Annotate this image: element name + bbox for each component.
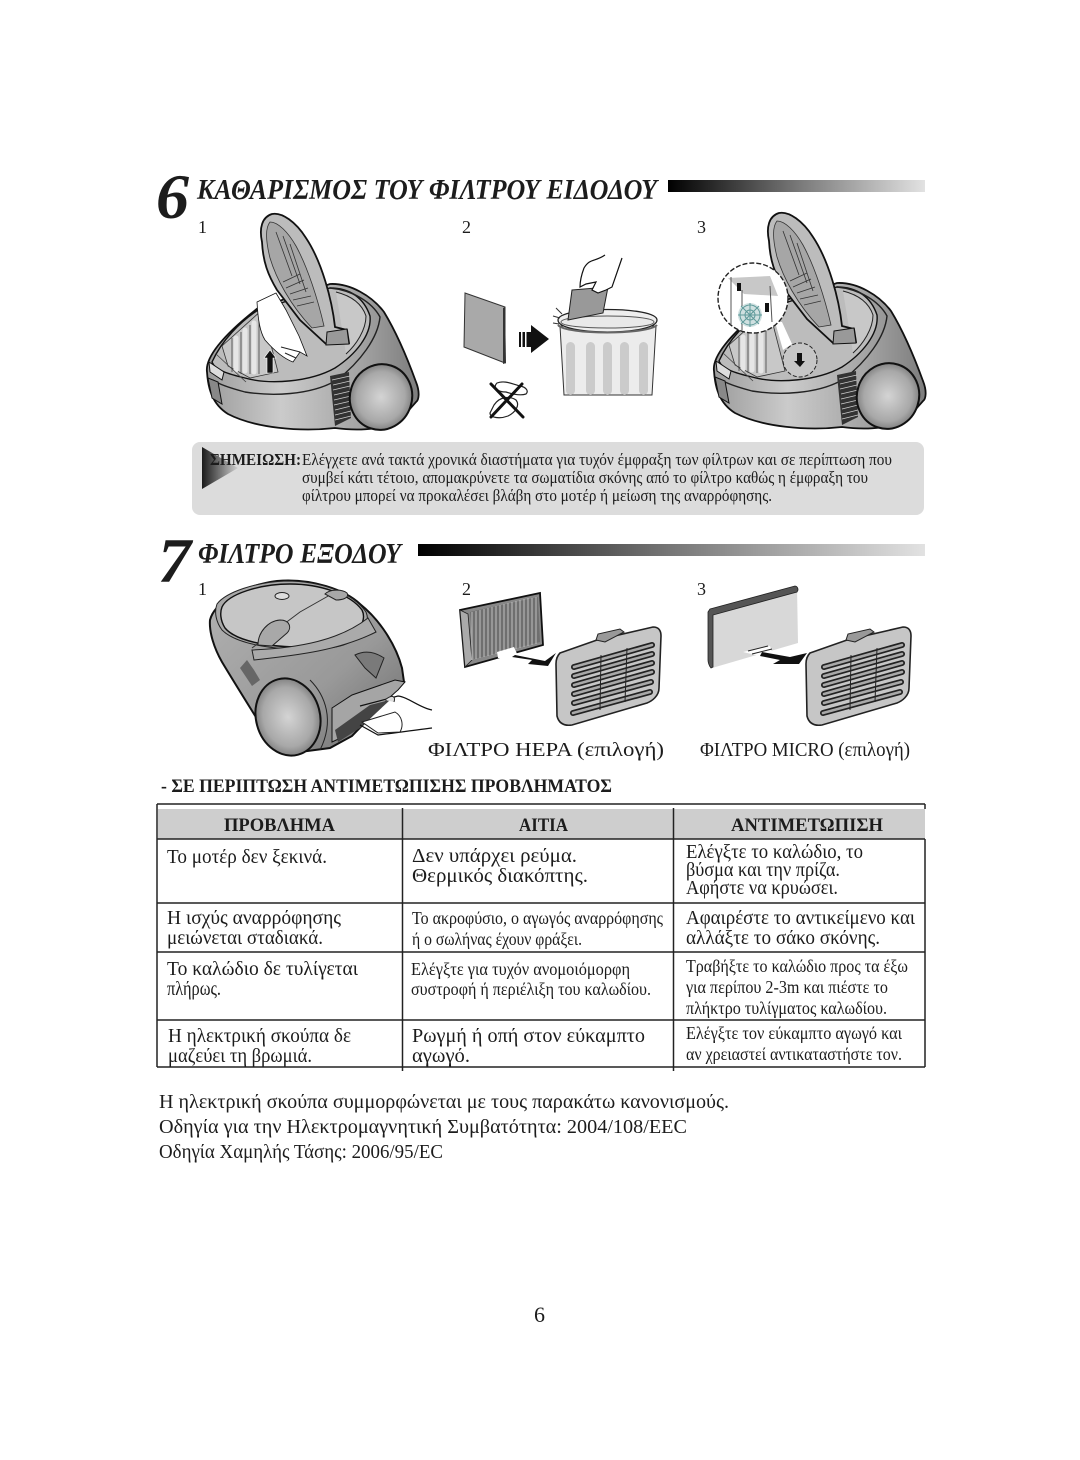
label: HEPA filter: ΦΙΛΤΡΟ HEPA (επιλογή) xyxy=(428,739,664,761)
step number 7-2: 2 xyxy=(462,579,471,599)
illustration: trash bin with hand and filter xyxy=(553,255,657,395)
note text: συμβεί κάτι τέτοιο, απομακρύνετε τα σωματίδια σκόνης από το φίλτρο καθώς η έμφραξη του xyxy=(302,468,868,487)
troubleshooting table xyxy=(157,804,925,1071)
table rows: Τραβήξτε το καλώδιο προς τα έξω xyxy=(686,956,908,976)
gradient bar: section 6 xyxy=(668,180,925,192)
table rows: Το ακροφύσιο, ο αγωγός αναρρόφησης xyxy=(412,908,663,928)
compliance text: Η ηλεκτρική σκούπα συμμορφώνεται με τους παρακάτω κανονισμούς. xyxy=(159,1091,729,1113)
table rows: μειώνεται σταδιακά. xyxy=(167,928,323,949)
table rows: βύσμα και την πρίζα. xyxy=(686,860,840,881)
table header: ΑΙΤΙΑ xyxy=(519,815,568,836)
note panel xyxy=(192,442,924,515)
icon: note triangle xyxy=(202,447,238,489)
heading: section 6: 6 xyxy=(156,161,189,232)
table rows: συστροφή ή περιέλιξη του καλωδίου. xyxy=(411,979,651,999)
illustration: closed vacuum with hand pulling out exhaust filter xyxy=(210,581,432,763)
table header: ΠΡΟΒΛΗΜΑ xyxy=(224,815,335,836)
illustration: filter grille for HEPA xyxy=(556,627,661,725)
table rows: για περίπου 2-3m και πιέστε το xyxy=(685,977,888,997)
label: micro filter: ΦΙΛΤΡΟ MICRO (επιλογή) xyxy=(700,739,910,761)
heading: section 7: ΦΙΛΤΡΟ ΕΞΟΔΟΥ xyxy=(198,538,403,570)
note text: Ελέγχετε ανά τακτά χρονικά διαστήματα για τυχόν έμφραξη των φίλτρων και σε περίπτωση που xyxy=(302,450,892,469)
step number 7-3: 3 xyxy=(697,579,706,599)
table rows: Θερμικός διακόπτης. xyxy=(412,866,588,887)
table rows xyxy=(167,842,916,1067)
table rows: ή ο σωλήνας έχουν φράξει. xyxy=(412,929,582,949)
heading: section 7 xyxy=(158,525,403,596)
heading: section 7: 7 xyxy=(158,525,194,596)
table rows: πλήκτρο τυλίγματος καλωδίου. xyxy=(686,998,887,1018)
table rows: Αφήστε να κρυώσει. xyxy=(686,878,838,899)
step number 6-2: 2 xyxy=(462,217,471,237)
note text: φίλτρου μπορεί να προκαλέσει βλάβη στο μοτέρ ή μείωση της αναρρόφησης. xyxy=(302,486,772,505)
heading: troubleshooting: - ΣΕ ΠΕΡΙΠΤΩΣΗ ΑΝΤΙΜΕΤΩΠΙΣΗΣ ΠΡΟΒΛΗΜΑΤΟΣ xyxy=(161,777,612,797)
illustration: micro filter and arrow xyxy=(708,586,807,668)
table rows: Δεν υπάρχει ρεύμα. xyxy=(412,846,577,867)
table rows: Ρωγμή ή οπή στον εύκαμπτο xyxy=(412,1026,645,1047)
table rows: μαζεύει τη βρωμιά. xyxy=(168,1046,312,1067)
table rows: Το καλώδιο δε τυλίγεται xyxy=(167,959,359,980)
table rows: αν χρειαστεί αντικαταστήστε τον. xyxy=(686,1044,902,1064)
table header xyxy=(224,815,883,836)
compliance text: Οδηγία για την Ηλεκτρομαγνητική Συμβατότητα: 2004/108/EEC xyxy=(159,1116,687,1138)
page number: 6 xyxy=(534,1302,545,1327)
step number 7-1: 1 xyxy=(198,579,207,599)
illustration: vacuum with hand removing inlet filter xyxy=(207,214,421,438)
compliance text xyxy=(159,1091,729,1163)
illustration: filter grille for micro xyxy=(806,627,911,725)
table rows: Το μοτέρ δεν ξεκινά. xyxy=(167,847,327,868)
compliance text: Οδηγία Χαμηλής Τάσης: 2006/95/EC xyxy=(159,1141,443,1163)
note text: ΣΗΜΕΙΩΣΗ: xyxy=(210,450,301,469)
heading: section 6: ΚΑΘΑΡΙΣΜΟΣ ΤΟΥ ΦΙΛΤΡΟΥ ΕΙΔΟΔΟΥ xyxy=(196,174,659,206)
table rows: Ελέγξτε τον εύκαμπτο αγωγό και xyxy=(686,1023,902,1043)
table rows: Ελέγξτε για τυχόν ανομοιόμορφη xyxy=(411,959,630,979)
note text xyxy=(210,450,892,505)
illustration: inlet filter square xyxy=(464,293,506,364)
table header: ΑΝΤΙΜΕΤΩΠΙΣΗ xyxy=(731,815,883,836)
table rows: Αφαιρέστε το αντικείμενο και xyxy=(686,908,916,929)
table rows: Η ισχύς αναρρόφησης xyxy=(167,908,341,929)
table rows: αλλάξτε το σάκο σκόνης. xyxy=(686,928,880,949)
table rows: Η ηλεκτρική σκούπα δε xyxy=(168,1026,351,1047)
table rows: πλήρως. xyxy=(167,979,221,1000)
heading: section 6 xyxy=(156,161,659,232)
step number 6-3: 3 xyxy=(697,217,706,237)
table rows: αγωγό. xyxy=(412,1046,470,1067)
illustration: vacuum with filter detail and magnifier xyxy=(714,213,928,437)
table rows: Ελέγξτε το καλώδιο, το xyxy=(686,842,863,863)
gradient bar: section 7 xyxy=(418,544,925,556)
illustration: HEPA filter and arrow xyxy=(460,593,556,667)
step number 6-1: 1 xyxy=(198,217,207,237)
icon: do not wash xyxy=(490,382,527,418)
arrow: into bin xyxy=(519,325,549,353)
